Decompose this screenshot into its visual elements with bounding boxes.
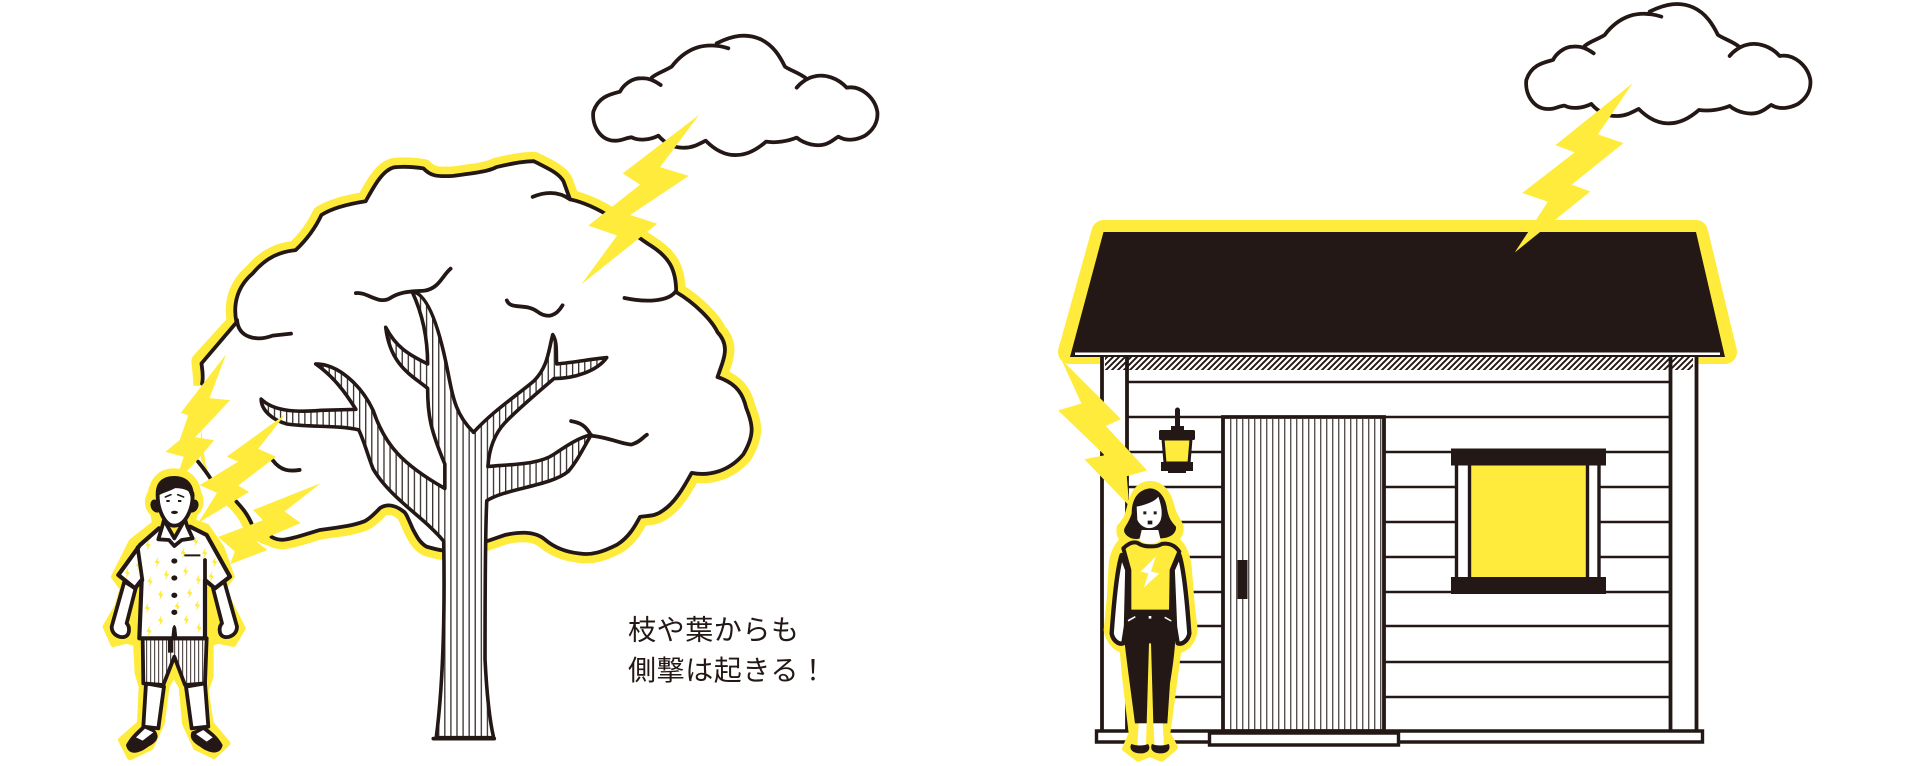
bolt: branch to man xyxy=(198,414,285,523)
man shorts white underlay xyxy=(143,638,207,685)
man right shoe strap xyxy=(196,730,213,742)
lantern top xyxy=(1159,430,1195,440)
house walls xyxy=(1096,356,1702,742)
man eyebrows xyxy=(165,495,184,497)
man eyes, brows and mouth xyxy=(166,500,181,514)
halo gap behind man's bolts xyxy=(181,386,232,510)
lantern bottom xyxy=(1161,462,1193,473)
window bottom bar xyxy=(1451,577,1606,594)
window xyxy=(1451,448,1606,594)
man left shoe strap xyxy=(136,729,153,741)
window glass xyxy=(1470,463,1588,579)
cloud above house xyxy=(1526,4,1810,123)
man left shoe xyxy=(126,725,158,753)
door step xyxy=(1210,733,1398,745)
bolt: cloud to tree xyxy=(581,115,699,284)
roof lightning bolt xyxy=(1515,83,1633,253)
bolt: canopy to man xyxy=(218,483,321,564)
man shirt buttons, pocket and slit xyxy=(168,554,200,653)
canopy outline lower left xyxy=(198,462,443,551)
bolt: tree to man head xyxy=(165,354,230,484)
woman trousers xyxy=(1123,613,1175,723)
wall white background xyxy=(1102,356,1697,733)
man shorts xyxy=(143,638,207,685)
caption text: 枝や葉からも xyxy=(628,614,800,646)
man yellow halo xyxy=(106,471,243,757)
panel: tree scene xyxy=(106,36,877,757)
roof yellow halo xyxy=(1070,232,1725,352)
side lightning bolt xyxy=(1058,359,1147,506)
caption text: 側撃は起きる！ xyxy=(628,655,828,686)
siding lines xyxy=(1128,382,1671,697)
tree canopy yellow halo xyxy=(201,161,752,554)
corner posts xyxy=(1102,357,1696,732)
branch twig xyxy=(571,421,647,445)
woman neck xyxy=(1139,530,1161,544)
woman arms xyxy=(1112,555,1189,644)
door handle xyxy=(1238,560,1248,599)
tree canopy white fill xyxy=(201,161,752,554)
man neck and collar xyxy=(158,519,193,546)
canopy leaf curls xyxy=(237,193,676,471)
man arms xyxy=(112,582,237,637)
eave white stripe xyxy=(1075,352,1720,355)
man shirt bolts pattern xyxy=(125,536,217,637)
man hair xyxy=(156,476,194,501)
man ears xyxy=(152,501,197,511)
woman eyes and mouth xyxy=(1143,511,1157,524)
woman face xyxy=(1137,497,1162,528)
woman shoes xyxy=(1130,744,1170,753)
tree base line xyxy=(433,737,494,741)
house base xyxy=(1096,731,1702,742)
canopy outline right and top xyxy=(201,161,752,554)
door hatching xyxy=(1227,419,1382,730)
door xyxy=(1210,417,1398,745)
woman shirt xyxy=(1123,542,1179,612)
roof fill xyxy=(1070,232,1725,357)
man right shoe xyxy=(191,727,223,752)
lantern rod and cap xyxy=(1171,408,1184,430)
man shirt xyxy=(118,527,230,638)
tree trunk and branches xyxy=(261,292,607,738)
wall lantern xyxy=(1159,408,1195,473)
panel: house scene xyxy=(1058,4,1810,759)
lightning bolts xyxy=(165,115,699,564)
woman yellow halo xyxy=(1107,484,1195,759)
window frame xyxy=(1456,463,1599,579)
man xyxy=(106,471,243,757)
soffit hatching xyxy=(1105,357,1693,370)
cloud above tree xyxy=(593,36,877,155)
woman xyxy=(1107,484,1195,759)
woman trouser pockets xyxy=(1128,616,1172,622)
woman shirt lightning mark xyxy=(1141,557,1159,587)
lantern glass xyxy=(1163,439,1191,463)
man legs xyxy=(143,683,208,728)
door frame xyxy=(1223,417,1384,731)
roof xyxy=(1070,232,1725,357)
tree xyxy=(181,161,752,739)
man face xyxy=(158,486,193,526)
woman socks xyxy=(1137,723,1164,746)
tree trunk white underlay xyxy=(261,292,607,738)
man shirt side seams xyxy=(138,547,205,580)
woman hair xyxy=(1124,488,1176,539)
door panel xyxy=(1223,417,1384,731)
window top bar xyxy=(1451,448,1606,466)
